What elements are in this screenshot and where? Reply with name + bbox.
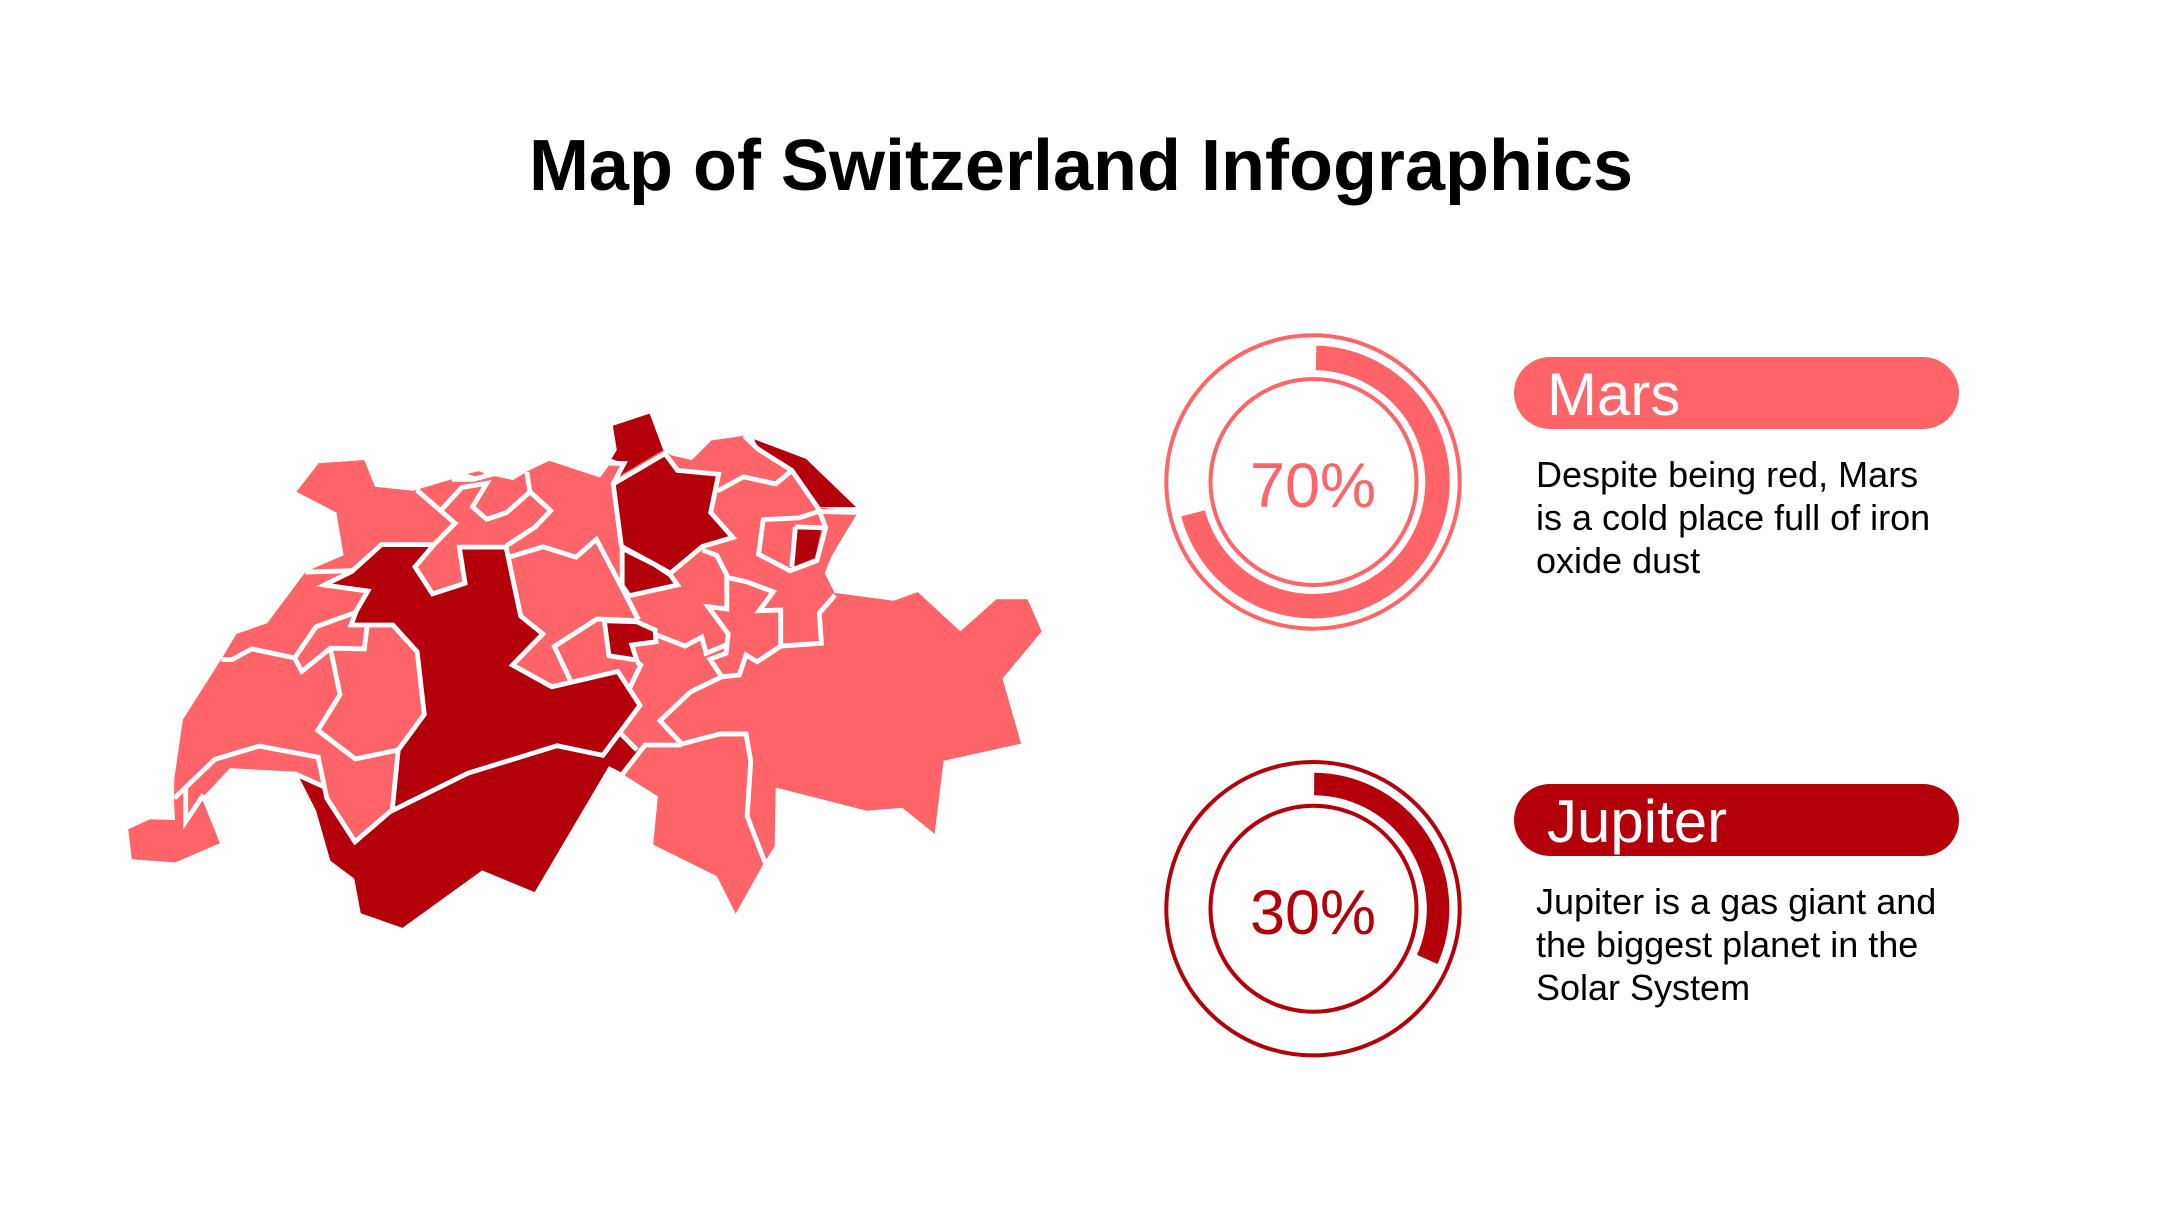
map: highlighted western regions and borders (174, 472, 640, 928)
region: Bern (324, 545, 640, 811)
map: highlighted eastern regions and borders (554, 414, 858, 862)
map: Basel sliver (467, 471, 486, 476)
map: eastern cantons (540, 436, 1042, 914)
region: Appenzell (794, 528, 821, 566)
eastern borders (554, 436, 858, 862)
map: western cantons (128, 460, 625, 862)
Mars pill heading: Mars (1547, 361, 1680, 428)
Jupiter pill heading (1514, 784, 1959, 856)
Jupiter donut chart: 30% (1166, 762, 1460, 1055)
Jupiter description: Solar System (1536, 967, 1750, 1008)
region: Schaffhausen (611, 414, 663, 477)
Mars donut chart: 70% (1166, 335, 1460, 629)
region: Zurich (613, 454, 733, 573)
Jupiter description: the biggest planet in the (1536, 924, 1918, 965)
Mars description: oxide dust (1536, 540, 1700, 581)
Mars description: Despite being red, Mars (1536, 454, 1918, 495)
map of Switzerland (128, 414, 1042, 928)
region: Lake Constance area (754, 439, 856, 507)
Jupiter description: Jupiter is a gas giant and (1536, 881, 1936, 922)
Jupiter percentage: 30% (1250, 878, 1376, 948)
region: Zug (622, 548, 677, 596)
region: Valais (299, 735, 637, 928)
Mars description: is a cold place full of iron (1536, 497, 1930, 538)
Mars percentage: 70% (1250, 451, 1376, 521)
Jupiter pill heading: Jupiter (1547, 788, 1727, 855)
region: Obwalden (604, 621, 656, 660)
Mars pill heading (1514, 357, 1959, 429)
western borders (174, 472, 639, 842)
title: Map of Switzerland Infographics (529, 126, 1633, 206)
